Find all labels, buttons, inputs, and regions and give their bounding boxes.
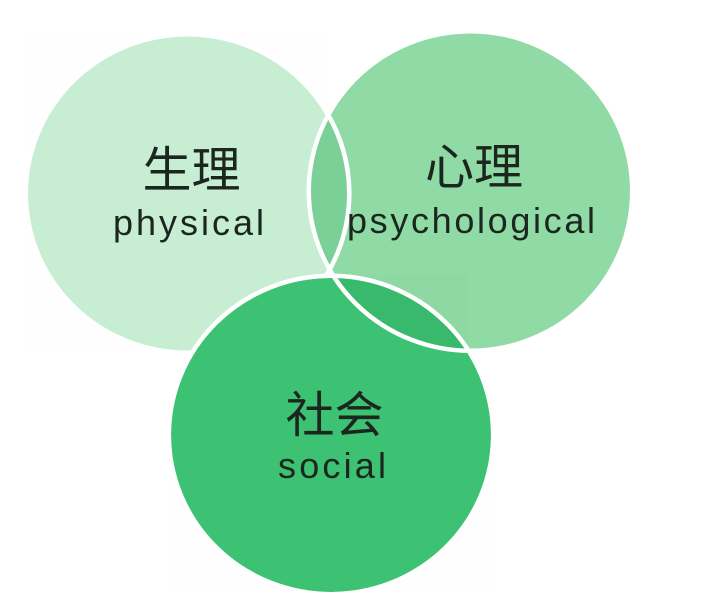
label: physical: [113, 144, 264, 243]
label: social: [278, 389, 386, 486]
label: physical: physical: [113, 202, 264, 243]
arc: social circle edge: [169, 276, 493, 594]
venn diagram: [28, 34, 630, 592]
label: physical: 生理: [142, 144, 241, 198]
label: psychological: psychological: [347, 200, 595, 241]
overlap: psychological and social: [332, 278, 468, 353]
label: psychological: [347, 141, 595, 241]
overlap: physical and psychological: [306, 116, 347, 270]
label: psychological: 心理: [425, 141, 523, 195]
label: social: 社会: [286, 389, 384, 443]
arc: physical circle edge: [26, 34, 349, 353]
circle: physical: [28, 36, 347, 350]
circle: psychological: [311, 34, 630, 348]
label: social: social: [278, 445, 386, 486]
circle: social: [171, 278, 491, 592]
